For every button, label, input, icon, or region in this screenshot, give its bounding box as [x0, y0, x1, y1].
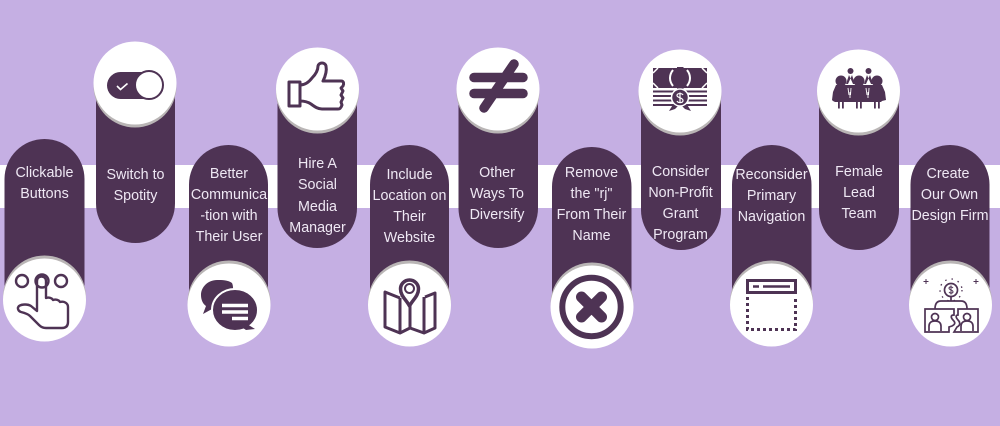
- text: Include Location on Their Website: Include: [386, 167, 433, 183]
- text: Remove the "rj" From Their Name: the "rj": [571, 186, 612, 202]
- text: Consider Non-Profit Grant Program: Consider: [652, 164, 709, 180]
- text: Remove the "rj" From Their Name: Name: [572, 228, 611, 244]
- pill 5: [370, 145, 449, 345]
- text: Include Location on Their Website: Location on: [373, 188, 447, 204]
- text: Switch to Spotity: Switch to: [106, 167, 165, 183]
- step 2: switch to Spotify: [94, 42, 176, 243]
- text: Create Our Own Design Firm: Our Own: [921, 187, 978, 203]
- text: Include Location on Their Website: Website: [384, 230, 435, 246]
- text: Female Lead Team: Female: [835, 164, 883, 180]
- text: Reconsider Primary Navigation: Navigation: [738, 209, 805, 225]
- icon: chat bubbles: [188, 260, 270, 346]
- text: Consider Non-Profit Grant Program: Non-Profit: [648, 185, 713, 201]
- text: Female Lead Team: Team: [842, 206, 876, 222]
- text: Remove the "rj" From Their Name: Remove: [565, 165, 618, 181]
- text: Better Communication with Their User: Their User: [196, 229, 263, 245]
- icon: map and pin: [368, 260, 451, 346]
- pill 9: [732, 145, 812, 345]
- icon: pointing hand: [3, 256, 86, 342]
- text: Include Location on Their Website: Their: [393, 209, 426, 225]
- text: Reconsider Primary Navigation: Primary: [747, 188, 797, 204]
- icon: thumbs up: [276, 48, 359, 134]
- text: Consider Non-Profit Grant Program: Program: [653, 227, 708, 243]
- text: Hire A Social Media Manager: Manager: [289, 220, 346, 236]
- step 9: reconsider primary navigation: [730, 145, 813, 346]
- step 1: clickable buttons: [3, 139, 86, 342]
- icon: toggle switch: [94, 42, 176, 128]
- step 3: better communication: [188, 145, 270, 346]
- text: Hire A Social Media Manager: Hire A: [298, 156, 337, 172]
- step 10: female lead team: [817, 50, 900, 250]
- step 11: create our own design firm: [909, 145, 992, 346]
- text: Better Communication with Their User: Communica: [191, 187, 267, 203]
- icon: money stack: [638, 50, 722, 136]
- text: Other Ways To Diversify: Diversify: [470, 207, 525, 223]
- step 4: hire a social media manager: [276, 48, 359, 248]
- icon: group of women: [817, 50, 900, 136]
- pill 7: [552, 147, 632, 347]
- text: Reconsider Primary Navigation: Reconsider: [735, 167, 808, 183]
- step 5: include location: [368, 145, 451, 346]
- text: Create Our Own Design Firm: Design Firm: [911, 208, 989, 224]
- text: Clickable Buttons: Buttons: [20, 186, 69, 202]
- step 7: remove the rj: [550, 147, 634, 348]
- text: Better Communication with Their User: Better: [210, 166, 248, 182]
- text: Consider Non-Profit Grant Program: Grant: [663, 206, 698, 222]
- pill 3: [189, 145, 268, 345]
- pill 10: [819, 52, 899, 250]
- pill 11: [910, 145, 990, 345]
- text: Other Ways To Diversify: Other: [479, 165, 515, 181]
- step 8: non-profit grant program: [638, 50, 722, 250]
- step 6: other ways to diversify: [456, 48, 540, 248]
- icon: browser window: [730, 260, 813, 346]
- icon: design firm puzzle: [909, 260, 992, 346]
- text: Create Our Own Design Firm: Create: [927, 166, 969, 182]
- icon: not equal sign: [456, 48, 540, 134]
- text: Switch to Spotity: Spotity: [114, 188, 158, 204]
- text: Female Lead Team: Lead: [843, 185, 875, 201]
- icon: circled X: [550, 262, 634, 348]
- text: Better Communication with Their User: -tion with: [200, 208, 258, 224]
- pill 8: [641, 52, 721, 250]
- pill 2: [96, 45, 175, 243]
- text: Other Ways To Diversify: Ways To: [470, 186, 524, 202]
- text: Hire A Social Media Manager: Media: [298, 199, 337, 215]
- pill 6: [458, 50, 538, 248]
- pill 1: [4, 139, 84, 339]
- text: Hire A Social Media Manager: Social: [298, 177, 337, 193]
- text: Clickable Buttons: Clickable: [15, 165, 74, 181]
- pill 4: [278, 50, 357, 248]
- text: Remove the "rj" From Their Name: From Their: [557, 207, 627, 223]
